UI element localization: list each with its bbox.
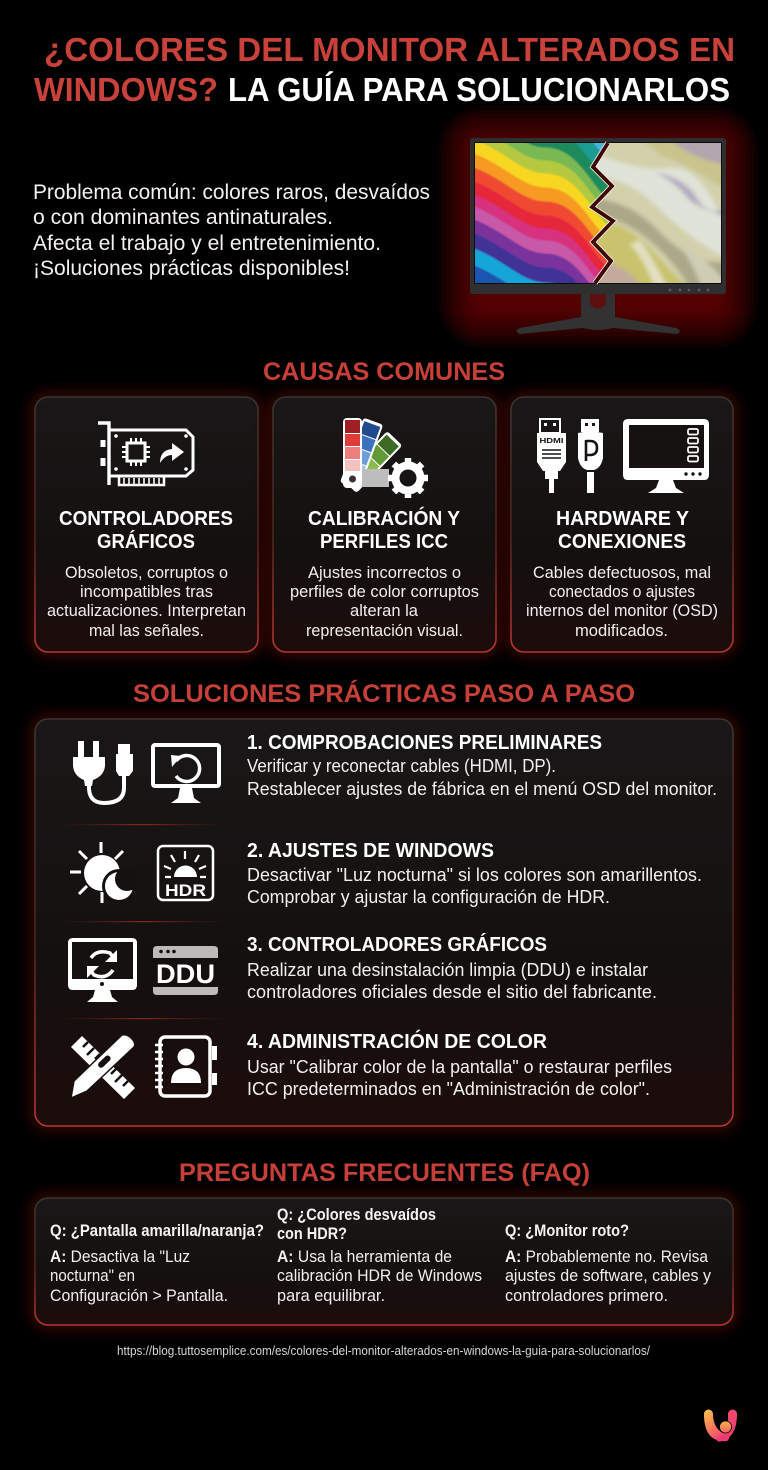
icon: colour swatches and gear: [340, 418, 428, 498]
panel: soluciones: [35, 719, 733, 1126]
panel: hardware y conexiones: [511, 397, 733, 652]
card text: Obsoletos, corruptos o: [65, 563, 228, 582]
step 4 text: Usar "Calibrar color de la pantalla" o restaurar perfiles: [247, 1056, 672, 1077]
FAQ 2: Q: ¿Colores desvaídos: [277, 1206, 436, 1224]
panel: calibración y perfiles ICC: [273, 397, 496, 652]
heading: soluciones prácticas: SOLUCIONES PRÁCTICAS PASO A PASO: [133, 679, 635, 708]
title: LA GUÍA PARA SOLUCIONARLOS: [228, 71, 730, 108]
step 4 text: 4. ADMINISTRACIÓN DE COLOR: [247, 1029, 548, 1053]
intro text: Afecta el trabajo y el entretenimiento.: [33, 232, 381, 255]
step 2 text: Desactivar "Luz nocturna" si los colores son amarillentos.: [247, 864, 702, 885]
card text: mal las señales.: [89, 621, 204, 640]
panel: controladores gráficos: [35, 397, 258, 652]
card text: Cables defectuosos, mal: [533, 563, 711, 582]
icon: graphics card: [98, 423, 193, 485]
card text: conectados o ajustes: [549, 582, 695, 601]
heading: preguntas frecuentes: PREGUNTAS FRECUENTES (FAQ): [179, 1159, 590, 1187]
icon: address book: [155, 1037, 217, 1096]
icon: logo: [704, 1410, 737, 1442]
icon: plug and cable: [73, 741, 133, 803]
card text: internos del monitor (OSD): [526, 601, 718, 620]
card text: alteran la: [350, 601, 419, 620]
FAQ 3: controladores primero.: [505, 1287, 668, 1305]
FAQ 2: con HDR?: [277, 1225, 347, 1243]
icon: monitor refresh: [68, 938, 137, 1002]
FAQ 2: A: Usa la herramienta de: [277, 1248, 452, 1266]
card text: modificados.: [575, 621, 668, 640]
step 4 text: ICC predeterminados en "Administración de color".: [247, 1078, 650, 1099]
FAQ 1: [50, 1222, 264, 1305]
intro text: ¡Soluciones prácticas disponibles!: [33, 257, 350, 280]
card text: perfiles de color corruptos: [290, 582, 479, 601]
card title: CONTROLADORES: [59, 508, 233, 530]
card title: CONEXIONES: [558, 531, 686, 553]
card text: [290, 563, 479, 640]
intro text: Problema común: colores raros, desvaídos: [33, 181, 430, 204]
title: [34, 31, 735, 108]
step 3 text: Realizar una desinstalación limpia (DDU) e instalar: [247, 959, 648, 980]
step 2 text: [247, 840, 702, 907]
intro text: [33, 181, 430, 280]
step 3 text: controladores oficiales desde el sitio del fabricante.: [247, 981, 657, 1002]
FAQ 1: Q: ¿Pantalla amarilla/naranja?: [50, 1222, 264, 1240]
step 2 text: 2. AJUSTES DE WINDOWS: [247, 840, 494, 862]
step 3 text: [247, 933, 657, 1002]
icon: ruler and pencil: [71, 1035, 135, 1099]
icon: HDR: [158, 846, 213, 900]
card text: incompatibles tras: [80, 582, 213, 601]
heading: causas comunes: CAUSAS COMUNES: [263, 358, 505, 386]
card title: [308, 506, 461, 553]
card text: Ajustes incorrectos o: [308, 563, 461, 582]
FAQ 2: [277, 1206, 482, 1305]
title: WINDOWS?: [34, 71, 218, 108]
source URL: https://blog.tuttosemplice.com/es/colores-del-monitor-alterados-en-windows-la-guia-para-solucionarlos/: [117, 1344, 650, 1358]
card text: representación visual.: [306, 621, 463, 640]
step 1 text: Restablecer ajustes de fábrica en el menú OSD del monitor.: [247, 778, 717, 799]
card title: CALIBRACIÓN Y: [308, 506, 461, 530]
panel: FAQ: [35, 1198, 733, 1325]
step 1 text: 1. COMPROBACIONES PRELIMINARES: [247, 732, 602, 754]
icon: monitor reset: [153, 745, 219, 803]
monitor illustration: [438, 106, 758, 348]
card title: HARDWARE Y: [556, 508, 690, 530]
icon: sun and moon: [70, 842, 139, 903]
FAQ 1: A: Desactiva la "Luz: [50, 1248, 190, 1266]
card text: [47, 563, 246, 640]
FAQ 2: para equilibrar.: [277, 1287, 385, 1305]
intro text: o con dominantes antinaturales.: [33, 206, 333, 229]
icon: HDMI, DisplayPort and monitor: [537, 419, 709, 493]
icon: HDMI, DisplayPort and monitor: HDMI: [540, 436, 564, 445]
FAQ 3: [505, 1222, 712, 1305]
card text: actualizaciones. Interpretan: [47, 601, 246, 620]
FAQ 3: ajustes de software, cables y: [505, 1267, 712, 1285]
card title: [59, 508, 233, 553]
card title: GRÁFICOS: [97, 530, 195, 553]
step 2 text: Comprobar y ajustar la configuración de HDR.: [247, 886, 610, 907]
step 1 text: [247, 732, 717, 799]
step 1 text: Verificar y reconectar cables (HDMI, DP).: [247, 755, 556, 776]
FAQ 3: Q: ¿Monitor roto?: [505, 1222, 629, 1240]
step 3 text: 3. CONTROLADORES GRÁFICOS: [247, 933, 547, 956]
FAQ 3: A: Probablemente no. Revisa: [505, 1248, 709, 1266]
card text: [526, 563, 718, 640]
FAQ 2: calibración HDR de Windows: [277, 1267, 482, 1285]
card title: [556, 508, 690, 553]
FAQ 1: Configuración > Pantalla.: [50, 1287, 228, 1305]
card title: PERFILES ICC: [320, 531, 448, 553]
title: ¿COLORES DEL MONITOR ALTERADOS EN: [44, 31, 735, 68]
icon: HDR: HDR: [165, 881, 206, 900]
FAQ 1: nocturna" en: [50, 1267, 135, 1285]
icon: DDU window: [153, 946, 218, 995]
icon: DDU window: DDU: [156, 959, 215, 989]
step 4 text: [247, 1029, 672, 1099]
